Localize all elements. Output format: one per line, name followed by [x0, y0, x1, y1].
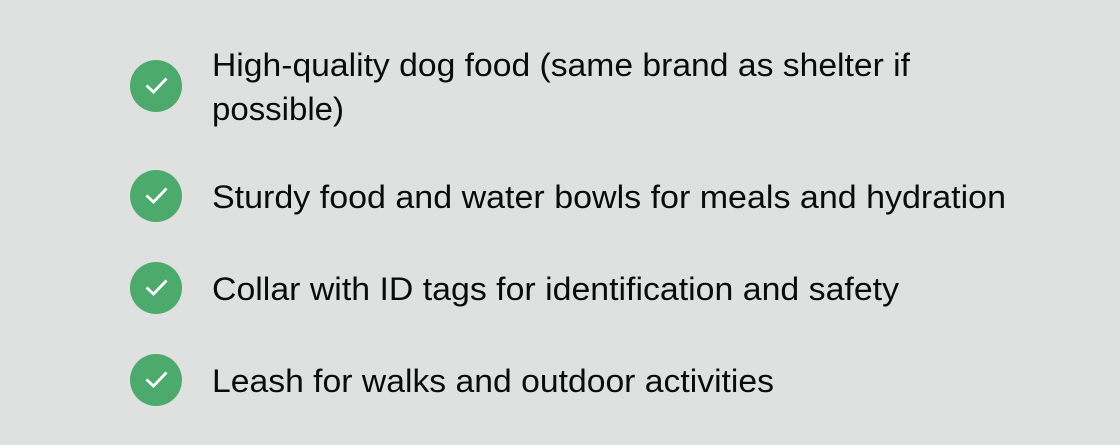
- checklist item: leash: [130, 354, 774, 406]
- text: bowls: Sturdy food and water bowls for meals and hydration: [212, 179, 1006, 215]
- icon: check mark: [130, 170, 182, 222]
- text: collar: Collar with ID tags for identification and safety: [212, 271, 899, 307]
- checklist item: bowls: [130, 170, 1006, 222]
- text: leash: Leash for walks and outdoor activities: [212, 363, 774, 399]
- text: dog food: High-quality dog food (same brand as shelter if: [212, 47, 910, 83]
- text: dog food: [212, 47, 910, 127]
- checklist item: dog food: [130, 47, 910, 127]
- icon: check mark: [130, 60, 182, 112]
- icon: check mark: [130, 354, 182, 406]
- text: dog food: possible): [212, 91, 344, 127]
- checklist item: collar: [130, 262, 899, 314]
- icon: check mark: [130, 262, 182, 314]
